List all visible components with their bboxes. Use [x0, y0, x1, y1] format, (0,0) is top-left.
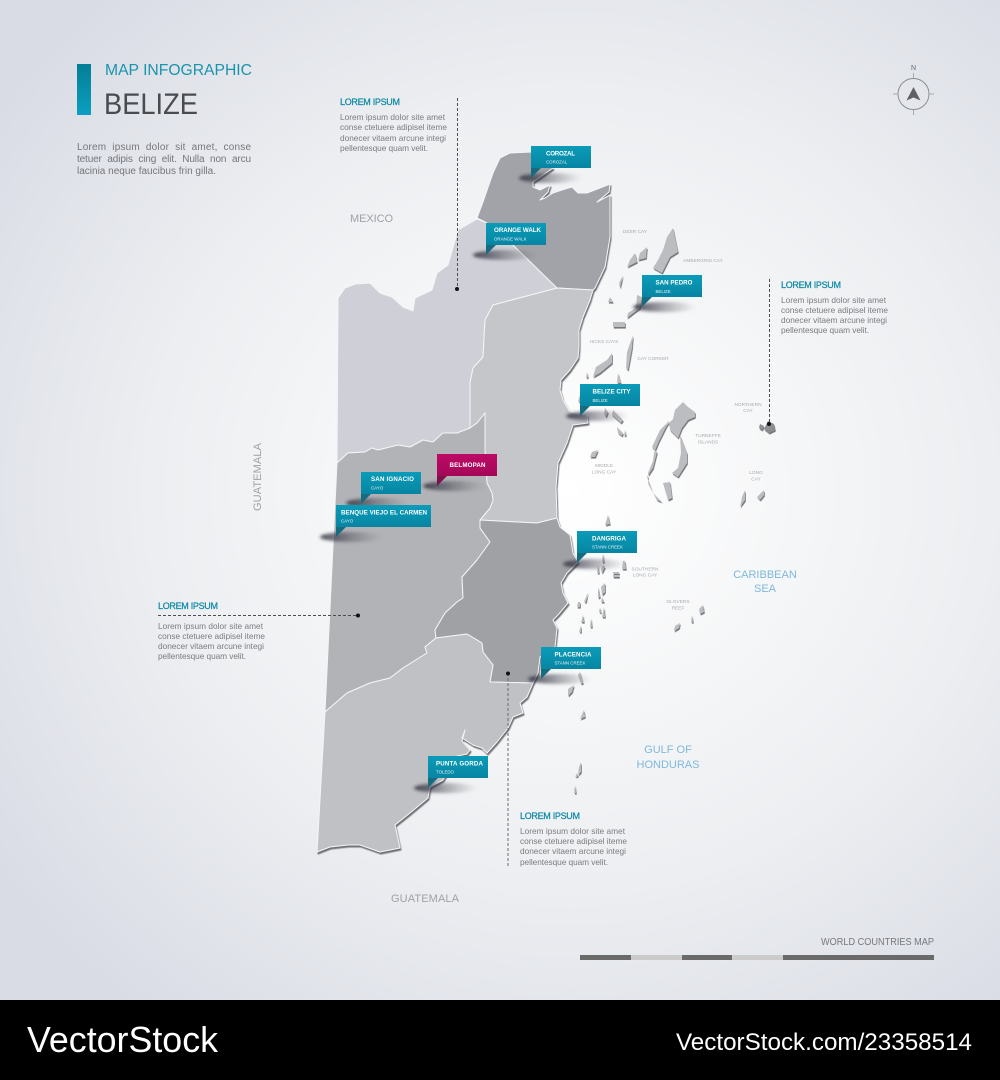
Glovers Reef cays	[674, 605, 704, 631]
callout: west: LOREM IPSUM	[158, 601, 218, 611]
scale legend: WORLD COUNTRIES MAP	[821, 937, 934, 948]
title block	[77, 62, 252, 177]
small cay labels: SOUTHERN	[632, 566, 659, 572]
island: Hicks Cays	[586, 353, 621, 383]
pin: Belize City	[580, 384, 640, 416]
small cay labels: REEF	[672, 606, 684, 612]
pin: Orange Walk: ORANGE WALK	[494, 236, 527, 242]
country title: BELIZE	[104, 88, 198, 121]
small cay labels: CAY	[751, 476, 762, 482]
pin: Orange Walk	[486, 223, 546, 255]
pin: Placencia: STANN CREEK	[554, 660, 585, 666]
small cay labels: LONG CAY	[633, 572, 658, 578]
map of Belize districts	[317, 152, 610, 852]
small cay labels: TURNEFFE	[695, 433, 721, 439]
callout: south	[506, 672, 627, 867]
intro text: Lorem ipsum dolor sit amet, conse	[77, 142, 251, 153]
small cay labels: LONG	[749, 470, 763, 476]
neighbouring country labels: MEXICO	[350, 213, 393, 225]
pin shadows	[320, 173, 697, 793]
footer watermark bar: VectorStock.com/23358514	[676, 1029, 972, 1056]
district: Toledo	[317, 634, 533, 852]
pin: Placencia: PLACENCIA	[554, 652, 592, 658]
pin: San Ignacio: CAYO	[371, 486, 384, 490]
district: Corozal	[477, 152, 610, 290]
sea labels: SEA	[754, 583, 777, 595]
pin: Corozal	[531, 146, 591, 178]
callout: east: pellentesque quam velit.	[781, 325, 869, 335]
callout: east: donecer vitaem arcune integi	[781, 315, 887, 325]
small cay labels: ISLANDS	[698, 440, 718, 446]
small cay labels: AMBERGRIS CAY	[683, 258, 724, 264]
small cay labels: DEER CAY	[623, 229, 648, 235]
callout: east	[767, 279, 888, 426]
pin: Belmopan capital: BELMOPAN	[450, 462, 486, 469]
island: Ambergris Cay	[653, 228, 678, 273]
pin: Dangriga: STANN CREEK	[592, 544, 623, 550]
scale legend	[580, 937, 934, 960]
callout: south: pellentesque quam velit.	[520, 857, 608, 867]
small cay labels: LONG CAY	[592, 470, 617, 476]
subtitle: MAP INFOGRAPHIC	[105, 62, 252, 79]
district: Stann Creek	[435, 518, 578, 683]
sea labels: CARIBBEAN	[733, 569, 797, 581]
neighbouring country labels: GUATEMALA	[252, 442, 264, 511]
pin: Punta Gorda	[428, 756, 488, 788]
small cay labels: NORTHERN	[734, 402, 762, 408]
pin: Belize City: BELIZE	[592, 398, 608, 403]
callout: east: conse ctetuere adipisel iteme	[781, 305, 888, 315]
island: Cay Corker	[626, 335, 633, 370]
footer watermark bar: VectorStock	[27, 1019, 219, 1060]
island: Deer Cay	[627, 247, 647, 267]
island: Northern Cay	[759, 421, 775, 433]
island: Middle Long Cay	[590, 450, 598, 457]
intro text: lacinia neque faucibus frin gilla.	[77, 166, 216, 177]
pin: San Ignacio	[361, 472, 421, 504]
callout: north: Lorem ipsum dolor site amet	[340, 112, 446, 122]
pin: San Ignacio: SAN IGNACIO	[371, 476, 414, 483]
pin: Placencia	[541, 647, 601, 679]
small cay labels: CAY CORKER	[637, 356, 669, 362]
callout: south: LOREM IPSUM	[520, 811, 580, 821]
pin: Punta Gorda: PUNTA GORDA	[436, 760, 484, 768]
island: Long Cay	[740, 490, 764, 507]
compass	[893, 65, 934, 115]
neighbouring country labels: GUATEMALA	[391, 893, 460, 905]
island: Turneffe Islands	[647, 402, 695, 502]
small cay labels: MIDDLE	[595, 463, 613, 469]
compass: N	[911, 65, 916, 72]
sea labels	[637, 569, 797, 771]
pin: Benque Viejo El Carmen: CAYO	[341, 518, 354, 524]
pin: San Pedro: BELIZE	[656, 289, 671, 294]
district: Orange Walk	[337, 219, 557, 463]
callout: north: conse ctetuere adipisel iteme	[340, 122, 447, 132]
footer watermark bar	[0, 1000, 1000, 1080]
pin: Corozal: COROZAL	[546, 150, 575, 158]
callout: north: pellentesque quam velit.	[340, 143, 428, 153]
Stann Creek cays	[577, 515, 626, 632]
district: Cayo	[325, 413, 493, 712]
callout: east: LOREM IPSUM	[781, 280, 841, 290]
callout: east: Lorem ipsum dolor site amet	[781, 295, 887, 305]
sea labels: GULF OF	[644, 744, 692, 756]
small cay labels: CAY	[743, 408, 754, 414]
pin: Benque Viejo El Carmen	[336, 505, 431, 537]
sea labels: HONDURAS	[637, 759, 699, 771]
callout: west	[158, 601, 360, 661]
small cay labels: HICKS CAYS	[590, 339, 618, 345]
callout: west: conse ctetuere adipisel iteme	[158, 631, 265, 641]
pin: Belmopan capital	[437, 454, 497, 486]
pin: San Pedro: SAN PEDRO	[656, 280, 693, 286]
pin: Corozal: COROZAL	[546, 160, 568, 164]
callout: south: Lorem ipsum dolor site amet	[520, 826, 626, 836]
callout: north: donecer vitaem arcune integi	[340, 133, 446, 143]
pin: Benque Viejo El Carmen: BENQUE VIEJO EL CARMEN	[341, 510, 428, 516]
neighbouring country labels	[252, 213, 460, 905]
pin: Punta Gorda: TOLEDO	[436, 770, 455, 774]
callout: north	[340, 97, 459, 291]
pin: San Pedro	[642, 275, 702, 307]
callout: south: conse ctetuere adipisel iteme	[520, 836, 627, 846]
cays and islands	[568, 228, 775, 793]
callout: west: Lorem ipsum dolor site amet	[158, 621, 264, 631]
small cay labels	[590, 229, 763, 612]
title accent bar	[77, 64, 91, 115]
pin: Belize City: BELIZE CITY	[592, 388, 631, 396]
callout: south: donecer vitaem arcune integi	[520, 846, 626, 856]
intro text: tetuer adipis cing elit. Nulla non arcu	[77, 154, 251, 165]
callout: west: donecer vitaem arcune integi	[158, 641, 264, 651]
district: Belize	[470, 288, 593, 523]
pin: Orange Walk: ORANGE WALK	[494, 227, 542, 234]
callout: north: LOREM IPSUM	[340, 97, 400, 107]
callout: west: pellentesque quam velit.	[158, 651, 246, 661]
small cay labels: GLOVERS	[666, 599, 690, 605]
pin: Dangriga: DANGRIGA	[592, 536, 627, 542]
pin: Dangriga	[577, 531, 637, 563]
